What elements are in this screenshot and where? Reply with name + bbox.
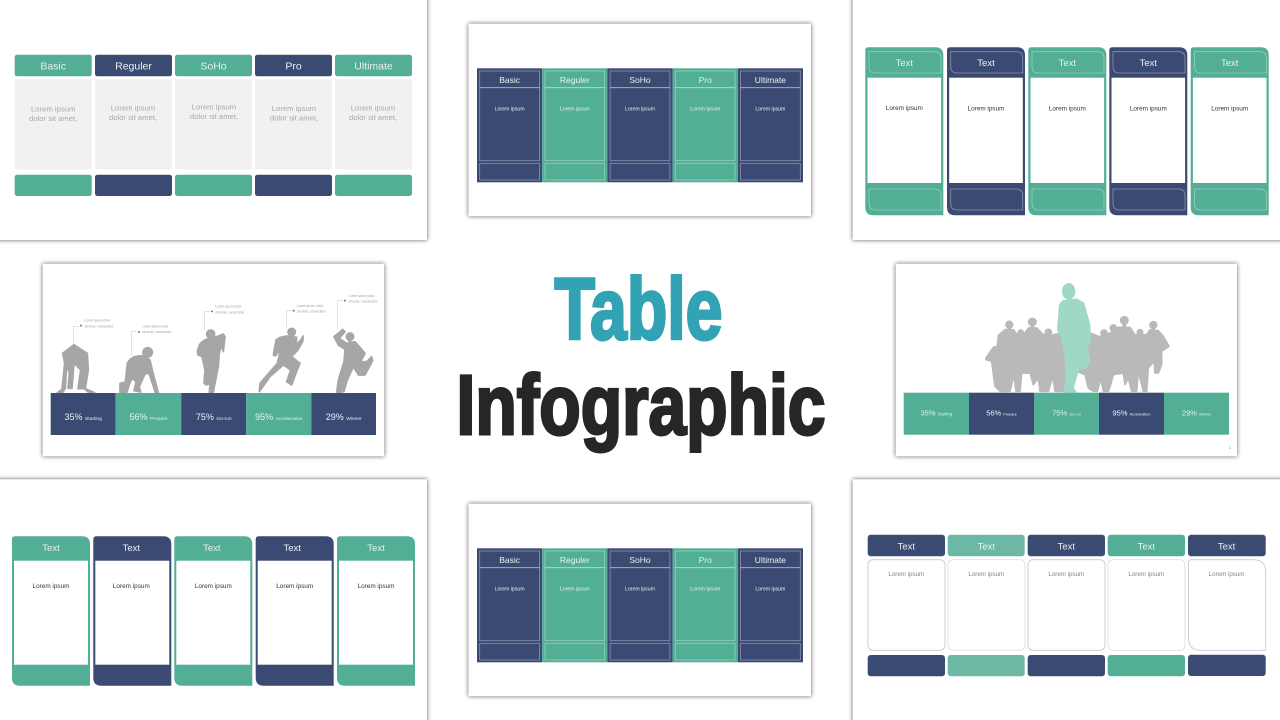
bar: 35% Starting [51, 393, 116, 435]
column: SoHo: dolor sit amet, [190, 112, 238, 121]
runner: winner: sit amet, consectetur [348, 300, 377, 304]
panel: slide middle right, crowd of runners [896, 264, 1237, 456]
column: Basic: Basic [499, 555, 521, 565]
bar: 35% Starting [904, 393, 969, 435]
card: column 3: Text [1059, 58, 1076, 69]
column 5: Text [1218, 541, 1236, 552]
column: Reguler [95, 55, 172, 196]
column: Reguler: dolor sit amet, [109, 113, 157, 122]
card: column 2: Text [123, 543, 140, 554]
card: column 3: Lorem ipsum [1049, 105, 1086, 112]
bar: 95% Acceleration: 95% Acceleration [1112, 409, 1151, 418]
bar: 95% Acceleration [246, 393, 312, 435]
bar: 35% Starting: 35% Starting [921, 409, 953, 418]
column 3: Text [1058, 541, 1075, 552]
panel: slide bottom centre, outlined block table [468, 504, 811, 696]
column: Basic [477, 68, 542, 182]
column: Reguler: Lorem ipsum [560, 107, 590, 113]
column: Ultimate [738, 548, 803, 662]
column 2: Lorem ipsum [968, 571, 1004, 578]
column: SoHo: SoHo [200, 60, 227, 72]
bar: 35% Starting: 35% Starting [65, 412, 102, 422]
panel: slide bottom left, tab cards [0, 479, 427, 720]
lead runner highlighted [1057, 283, 1091, 392]
column: Pro: dolor sit amet, [270, 114, 318, 122]
crowd silhouette [986, 283, 1169, 392]
column: Pro: Pro [285, 60, 302, 72]
column: Pro: Lorem ipsum [690, 107, 720, 113]
column: SoHo [607, 548, 673, 662]
runner: winner: Lorem ipsum dolor [348, 294, 374, 298]
panel: slide top centre, outlined block table [468, 24, 811, 216]
card: column 1 [12, 536, 90, 686]
card: column 5: Lorem ipsum [1211, 105, 1248, 112]
column: Basic [477, 548, 542, 662]
card: column 3 [1028, 47, 1106, 215]
column: Reguler [542, 68, 607, 182]
card: column 4 [256, 536, 334, 686]
column: SoHo: Lorem ipsum [625, 587, 655, 593]
column 2 [948, 535, 1025, 676]
runner: acceleration [259, 304, 326, 392]
runner: prepare: sit amet, consectetur [142, 330, 171, 334]
column: Ultimate [335, 55, 412, 196]
column 4: Text [1138, 541, 1155, 552]
card: column 1: Text [42, 543, 60, 554]
card: column 5 [1191, 47, 1269, 215]
silhouettes and callouts [57, 294, 377, 393]
panel: slide top right, tab cards with inner outlines [853, 0, 1280, 240]
column: SoHo: Lorem ipsum [192, 102, 236, 112]
runner: starting position: sit amet, consectetur [84, 325, 113, 329]
card: column 2: Lorem ipsum [968, 105, 1004, 112]
runner: go run [197, 305, 244, 393]
column 3: Lorem ipsum [1048, 571, 1084, 578]
column: Basic: Lorem ipsum [495, 586, 525, 592]
column: Basic: Basic [499, 75, 521, 85]
column: Pro: Pro [699, 75, 712, 85]
card: column 2: Text [977, 58, 995, 69]
title: Table [554, 261, 722, 358]
column: Reguler: Reguler [560, 75, 590, 85]
column 2: Text [978, 541, 995, 552]
page number: 1 [1229, 446, 1231, 450]
bar: 56% Prepare [116, 393, 181, 435]
card: column 5: Text [1221, 58, 1239, 69]
panel: slide bottom right, header and footer bars with outlined bodies [853, 479, 1280, 720]
card: column 4: Text [283, 543, 301, 554]
bar: 29% Winner [312, 393, 376, 435]
runner: starting position [57, 319, 113, 393]
column: Reguler [542, 548, 607, 662]
column: Ultimate [738, 68, 803, 182]
column: SoHo: Lorem ipsum [625, 107, 655, 113]
column 5 [1188, 535, 1266, 676]
card: column 1: Text [896, 58, 913, 69]
card: column 4: Lorem ipsum [1130, 105, 1167, 112]
runner: go run: Lorem ipsum dolor [215, 305, 241, 309]
column: Basic: Lorem ipsum [31, 104, 75, 114]
column: SoHo: SoHo [629, 555, 651, 565]
runner: acceleration: sit amet, consectetur [297, 309, 326, 313]
column: SoHo: SoHo [629, 75, 651, 85]
card: column 2: Lorem ipsum [113, 583, 150, 590]
column: Ultimate: Ultimate [755, 75, 786, 85]
column: Ultimate: Lorem ipsum [755, 107, 785, 113]
card: column 4: Lorem ipsum [276, 583, 313, 590]
column 4 [1108, 535, 1185, 676]
column: SoHo [607, 68, 673, 182]
column: Reguler: Reguler [115, 60, 152, 72]
column: Ultimate: Lorem ipsum [755, 587, 785, 593]
bar: 75% Go-run: 75% Go-run [196, 412, 232, 422]
bar: 75% Go-run [181, 393, 246, 435]
runner: winner [334, 294, 377, 393]
card: column 3: Text [203, 543, 221, 554]
bar: 56% Prepare: 56% Prepare [986, 409, 1017, 418]
bar: 75% Go run: 75% Go run [1052, 409, 1081, 418]
column: Ultimate: Lorem ipsum [351, 104, 395, 112]
title [456, 261, 826, 452]
bar: 29% Winner [1164, 393, 1229, 435]
bar: 95% Acceleration [1099, 393, 1164, 435]
column: Pro [673, 548, 738, 662]
column: Pro: Pro [699, 555, 712, 565]
column: Pro [673, 68, 738, 182]
column: Ultimate: Ultimate [755, 555, 786, 565]
column 5: Lorem ipsum [1209, 571, 1244, 578]
card: column 3 [174, 536, 252, 686]
card: column 1: Lorem ipsum [886, 105, 923, 112]
column 1: Text [898, 541, 915, 552]
column: Reguler: Lorem ipsum [560, 587, 590, 593]
column: Basic: Basic [40, 60, 66, 72]
column: Basic [15, 55, 92, 196]
card: column 1 [865, 47, 943, 215]
bar: 95% Acceleration: 95% Acceleration [255, 412, 303, 422]
bar: 29% Winner: 29% Winner [1182, 409, 1212, 418]
column 3 [1028, 535, 1105, 676]
column 4: Lorem ipsum [1128, 571, 1164, 578]
column: SoHo [175, 55, 252, 196]
column: Pro: Lorem ipsum [690, 587, 720, 593]
panel: slide middle left, five runner stages [43, 264, 384, 456]
card: column 5 [337, 536, 415, 686]
runner: go run: sit amet, consectetur [215, 310, 244, 314]
column 1 [868, 535, 945, 676]
runner: prepare [120, 324, 171, 393]
column: Pro: Lorem ipsum [272, 104, 316, 113]
column 1: Lorem ipsum [888, 571, 924, 578]
card: column 2 [93, 536, 171, 686]
column: Pro [255, 55, 332, 196]
title: Infographic [456, 358, 826, 452]
card: column 1: Lorem ipsum [33, 583, 69, 590]
card: column 2 [947, 47, 1025, 215]
column: Reguler: Lorem ipsum [111, 104, 155, 112]
bar: 75% Go run [1034, 393, 1099, 435]
column: Basic: dolor sit amet, [29, 114, 77, 123]
card: column 4: Text [1140, 58, 1157, 69]
bar: 56% Prepare: 56% Prepare [130, 412, 168, 422]
column: Ultimate: Ultimate [354, 60, 393, 72]
panel: slide top left, rounded table with grey bodies [0, 0, 427, 240]
column: Basic: Lorem ipsum [495, 106, 525, 112]
runner: starting position: Lorem ipsum dolor [84, 319, 110, 323]
column: Reguler: Reguler [560, 555, 590, 565]
card: column 5: Lorem ipsum [358, 583, 394, 590]
card: column 3: Lorem ipsum [195, 583, 232, 590]
bar: 56% Prepare [969, 393, 1034, 435]
runner: acceleration: Lorem ipsum dolor [297, 304, 323, 308]
runner: prepare: Lorem ipsum dolor [142, 324, 168, 328]
card: column 4 [1109, 47, 1187, 215]
bar: 29% Winner: 29% Winner [326, 412, 362, 422]
column: Ultimate: dolor sit amet, [349, 113, 397, 122]
card: column 5: Text [367, 543, 385, 554]
